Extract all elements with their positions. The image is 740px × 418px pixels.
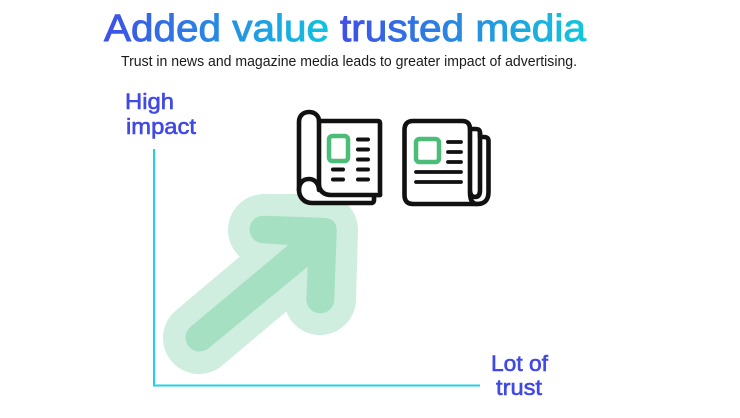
arrow: inner [186,216,337,352]
title: trusted media [340,8,587,50]
y axis label: High impact: impact [126,114,196,139]
magazine text lines [333,140,368,180]
title [104,8,587,50]
y axis label: High impact [125,89,196,139]
title: Added value [104,8,329,50]
magazine photo [329,136,348,161]
icon: folded magazine [299,112,380,203]
icon: newspaper [404,121,488,204]
subtitle: Trust in news and magazine media leads to greater impact of advertising. [121,53,577,70]
newspaper photo [416,139,439,162]
x axis label: Lot of trust: Lot of [491,351,549,376]
arrow: outer halo [199,230,322,338]
newspaper text lines [416,142,461,182]
chart axes [154,149,480,386]
x axis label: Lot of trust: trust [496,375,542,400]
y axis label: High impact: High [125,89,174,114]
x axis label: Lot of trust [491,351,549,400]
